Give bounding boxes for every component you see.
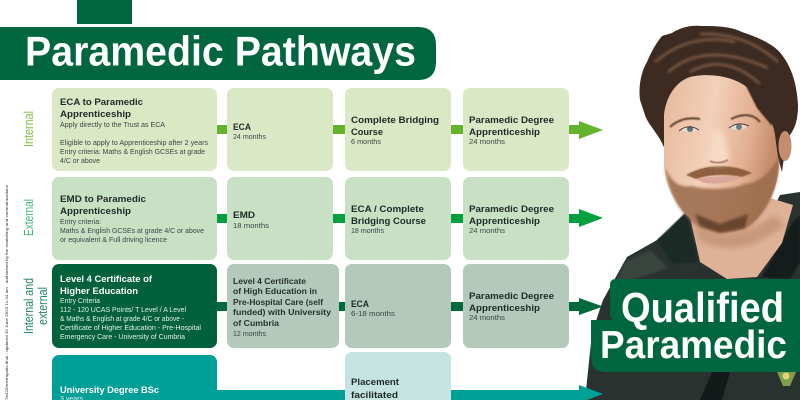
card: Level 4 Certificate of High Education in Pre-Hospital Care — [227, 264, 339, 348]
card: Level 4 Certificate of Higher Education — [52, 264, 217, 348]
card: Level 4 Certificate of Higher Education: Entry Criteria — [60, 298, 100, 305]
eyes — [681, 126, 697, 132]
callout: Qualified Paramedic: Paramedic — [600, 324, 787, 367]
pathway row: internal — [52, 88, 603, 171]
mouth — [696, 176, 743, 184]
chin shadow — [695, 214, 748, 233]
connector arrow: internal and external — [217, 298, 603, 315]
card: University Degree BSc: University Degree BSc — [60, 385, 160, 396]
card: ECA: ECA — [233, 122, 251, 133]
card: ECA: 6-18 months — [351, 311, 396, 318]
under-chin shadow — [692, 215, 785, 248]
card: ECA / Complete Bridging Course — [345, 177, 451, 260]
card: Complete Bridging Course: Complete Bridging — [351, 115, 439, 126]
card: ECA: 24 months — [233, 134, 267, 141]
card: ECA / Complete Bridging Course: Bridging Course — [351, 216, 426, 227]
card: ECA — [345, 264, 451, 348]
card: ECA / Complete Bridging Course: ECA / Complete — [351, 204, 424, 215]
card: Paramedic Degree Apprenticeship: Apprenticeship — [469, 127, 540, 138]
photo: qualified paramedic portrait — [585, 26, 800, 400]
card: Level 4 Certificate of High Education in Pre-Hospital Care: 12 months — [233, 331, 267, 338]
card: Paramedic Degree Apprenticeship: 24 months — [469, 228, 506, 235]
jacket — [585, 192, 800, 400]
card: Level 4 Certificate of High Education in Pre-Hospital Care: Level 4 Certificate — [233, 276, 306, 286]
neck — [688, 195, 793, 279]
card: Paramedic Degree Apprenticeship: Apprenticeship — [469, 216, 540, 227]
row label: internal and external: Internal and — [22, 278, 36, 334]
card: Level 4 Certificate of Higher Education: Certificate of Higher Education - Pre-Hospital — [60, 325, 201, 332]
row label: internal and external — [22, 278, 50, 334]
row label: internal: Internal — [22, 111, 36, 147]
card: Placement facilitated: Placement — [351, 377, 400, 388]
card: ECA — [227, 88, 333, 171]
card: University Degree BSc — [52, 355, 217, 400]
connector arrow: university degree — [217, 385, 603, 400]
card: Level 4 Certificate of High Education in Pre-Hospital Care: funded) with University — [233, 307, 331, 317]
row label: external: External — [22, 199, 36, 236]
card: Paramedic Degree Apprenticeship: Paramedic Degree — [469, 291, 554, 302]
card: EMD to Paramedic Apprenticeship: EMD to Paramedic — [60, 194, 147, 205]
top tab — [77, 0, 132, 24]
card: Level 4 Certificate of High Education in Pre-Hospital Care: of High Education in — [233, 286, 317, 296]
right temple hair — [745, 84, 776, 126]
stubble beard — [665, 155, 779, 232]
card: Paramedic Degree Apprenticeship: Paramedic Degree — [469, 115, 554, 126]
title banner — [0, 27, 436, 80]
card: Level 4 Certificate of Higher Education: Level 4 Certificate of — [60, 274, 153, 285]
card: Level 4 Certificate of Higher Education: 112 - 120 UCAS Points/ T Level / A Level — [60, 307, 186, 314]
card: ECA / Complete Bridging Course: 18 months — [351, 228, 385, 235]
card: ECA to Paramedic Apprenticeship: Entry criteria: Maths & English GCSEs at grade — [60, 149, 205, 156]
ear — [778, 131, 792, 161]
card: Paramedic Degree Apprenticeship: Paramedic Degree — [469, 204, 554, 215]
card: ECA to Paramedic Apprenticeship: Apprenticeship — [60, 109, 131, 120]
card: Paramedic Degree Apprenticeship: 24 months — [469, 315, 506, 322]
callout: Qualified Paramedic — [591, 279, 800, 372]
vertical print note: 7b420/metropolis-final - updated 20 June 2023 11:34 am · authorised by the marketing and communications — [5, 185, 9, 400]
card: Level 4 Certificate of Higher Education: & Maths & English at grade 4/C or above - — [60, 316, 185, 323]
card: Complete Bridging Course: 6 months — [351, 139, 382, 146]
card: EMD: 18 months — [233, 223, 270, 230]
card: EMD to Paramedic Apprenticeship: Entry criteria: — [60, 219, 101, 226]
hair back — [639, 26, 798, 172]
card: Paramedic Degree Apprenticeship: 24 months — [469, 139, 506, 146]
connector arrow: internal — [217, 121, 603, 139]
card: Level 4 Certificate of Higher Education: Emergency Care - University of Cumbria — [60, 334, 185, 341]
card: EMD to Paramedic Apprenticeship: Apprenticeship — [60, 206, 131, 217]
callout: Qualified Paramedic: Qualified — [621, 284, 784, 331]
card: ECA to Paramedic Apprenticeship: Eligible to apply to Apprenticeship after 2 years — [60, 140, 209, 147]
card: Paramedic Degree Apprenticeship — [463, 177, 569, 260]
pathway row: internal and external — [52, 264, 603, 348]
title: Paramedic Pathways — [25, 28, 416, 74]
jacket shading — [657, 212, 698, 264]
card: Level 4 Certificate of High Education in Pre-Hospital Care: of Cumbria — [233, 318, 279, 328]
uniform badge — [777, 372, 796, 386]
card: EMD to Paramedic Apprenticeship: Maths & English GCSEs at grade 4/C or above — [60, 228, 204, 235]
card: ECA to Paramedic Apprenticeship: ECA to Paramedic — [60, 97, 144, 108]
card: Paramedic Degree Apprenticeship — [463, 264, 569, 348]
card: EMD: EMD — [233, 210, 255, 221]
pathway row: external — [52, 177, 603, 260]
pathway row: university degree — [52, 352, 603, 400]
moustache — [686, 166, 752, 179]
card: ECA to Paramedic Apprenticeship — [52, 88, 217, 171]
eyebrows — [670, 118, 700, 127]
card: Complete Bridging Course: Course — [351, 127, 383, 138]
card: Complete Bridging Course — [345, 88, 451, 171]
connector arrow: external — [217, 209, 603, 227]
card: EMD — [227, 177, 333, 260]
card: EMD to Paramedic Apprenticeship: or equivalent & Full driving licence — [60, 237, 167, 244]
card: Paramedic Degree Apprenticeship — [463, 88, 569, 171]
face — [664, 75, 779, 232]
card: Level 4 Certificate of High Education in Pre-Hospital Care: Pre-Hospital Care (self — [233, 297, 323, 307]
card: ECA to Paramedic Apprenticeship: 4/C or above — [60, 158, 100, 165]
card: EMD to Paramedic Apprenticeship — [52, 177, 217, 260]
card: Paramedic Degree Apprenticeship: Apprenticeship — [469, 303, 540, 314]
card: ECA: ECA — [351, 299, 369, 310]
hair highlights — [655, 34, 778, 84]
card: ECA to Paramedic Apprenticeship: Apply directly to the Trust as ECA — [60, 122, 165, 129]
card: Placement facilitated — [345, 352, 451, 400]
card: Level 4 Certificate of Higher Education: Higher Education — [60, 286, 138, 297]
row label: internal and external: external — [36, 287, 50, 325]
nose — [706, 130, 730, 165]
